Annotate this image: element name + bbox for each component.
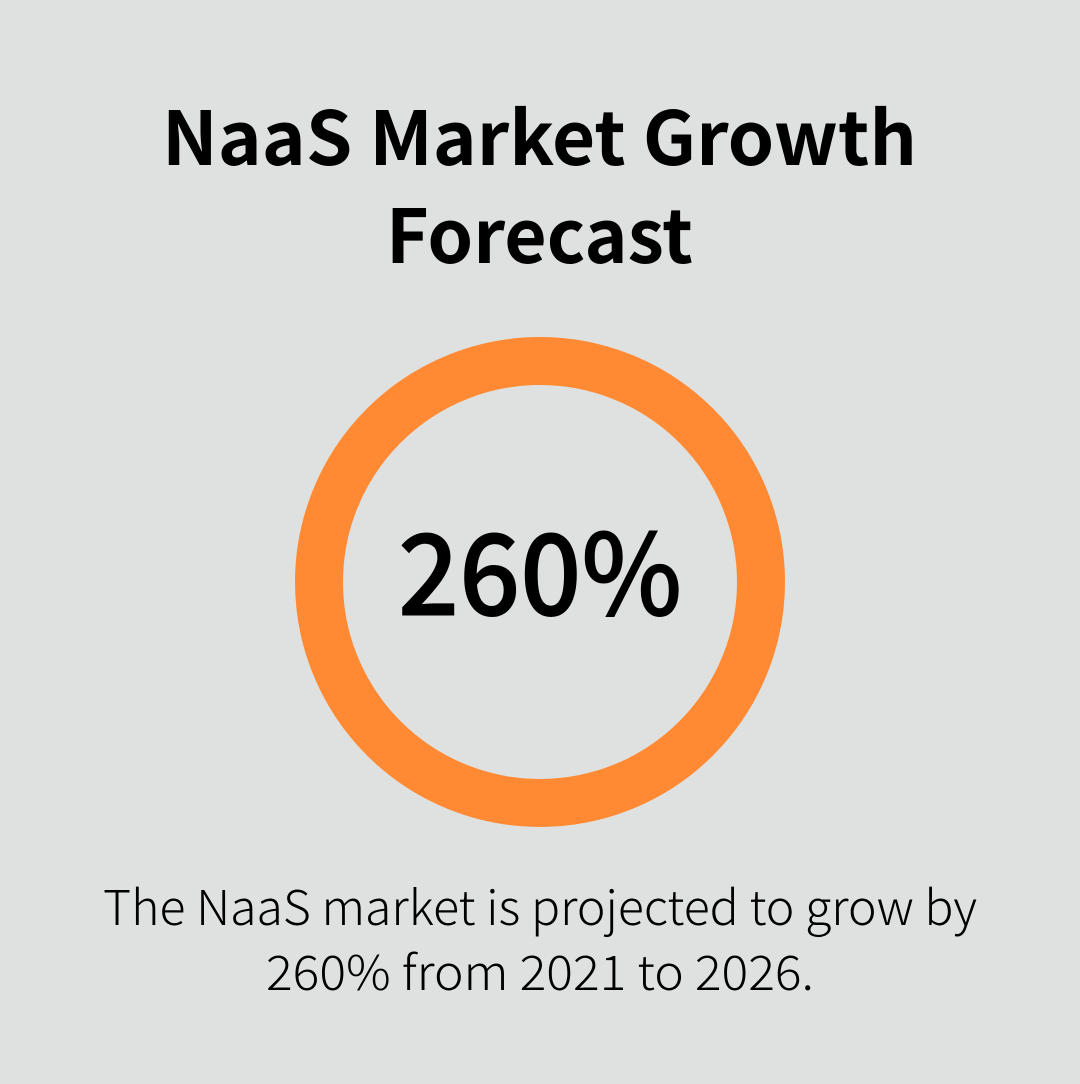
title xyxy=(162,80,917,285)
title: Forecast xyxy=(386,178,693,285)
ring value: 260%: 260% xyxy=(398,486,682,648)
description: The NaaS market is projected to grow by xyxy=(103,869,977,939)
title: NaaS Market Growth xyxy=(162,80,917,187)
description xyxy=(103,869,977,1004)
description: 260% from 2021 to 2026. xyxy=(266,934,814,1004)
donut ring xyxy=(319,361,761,803)
